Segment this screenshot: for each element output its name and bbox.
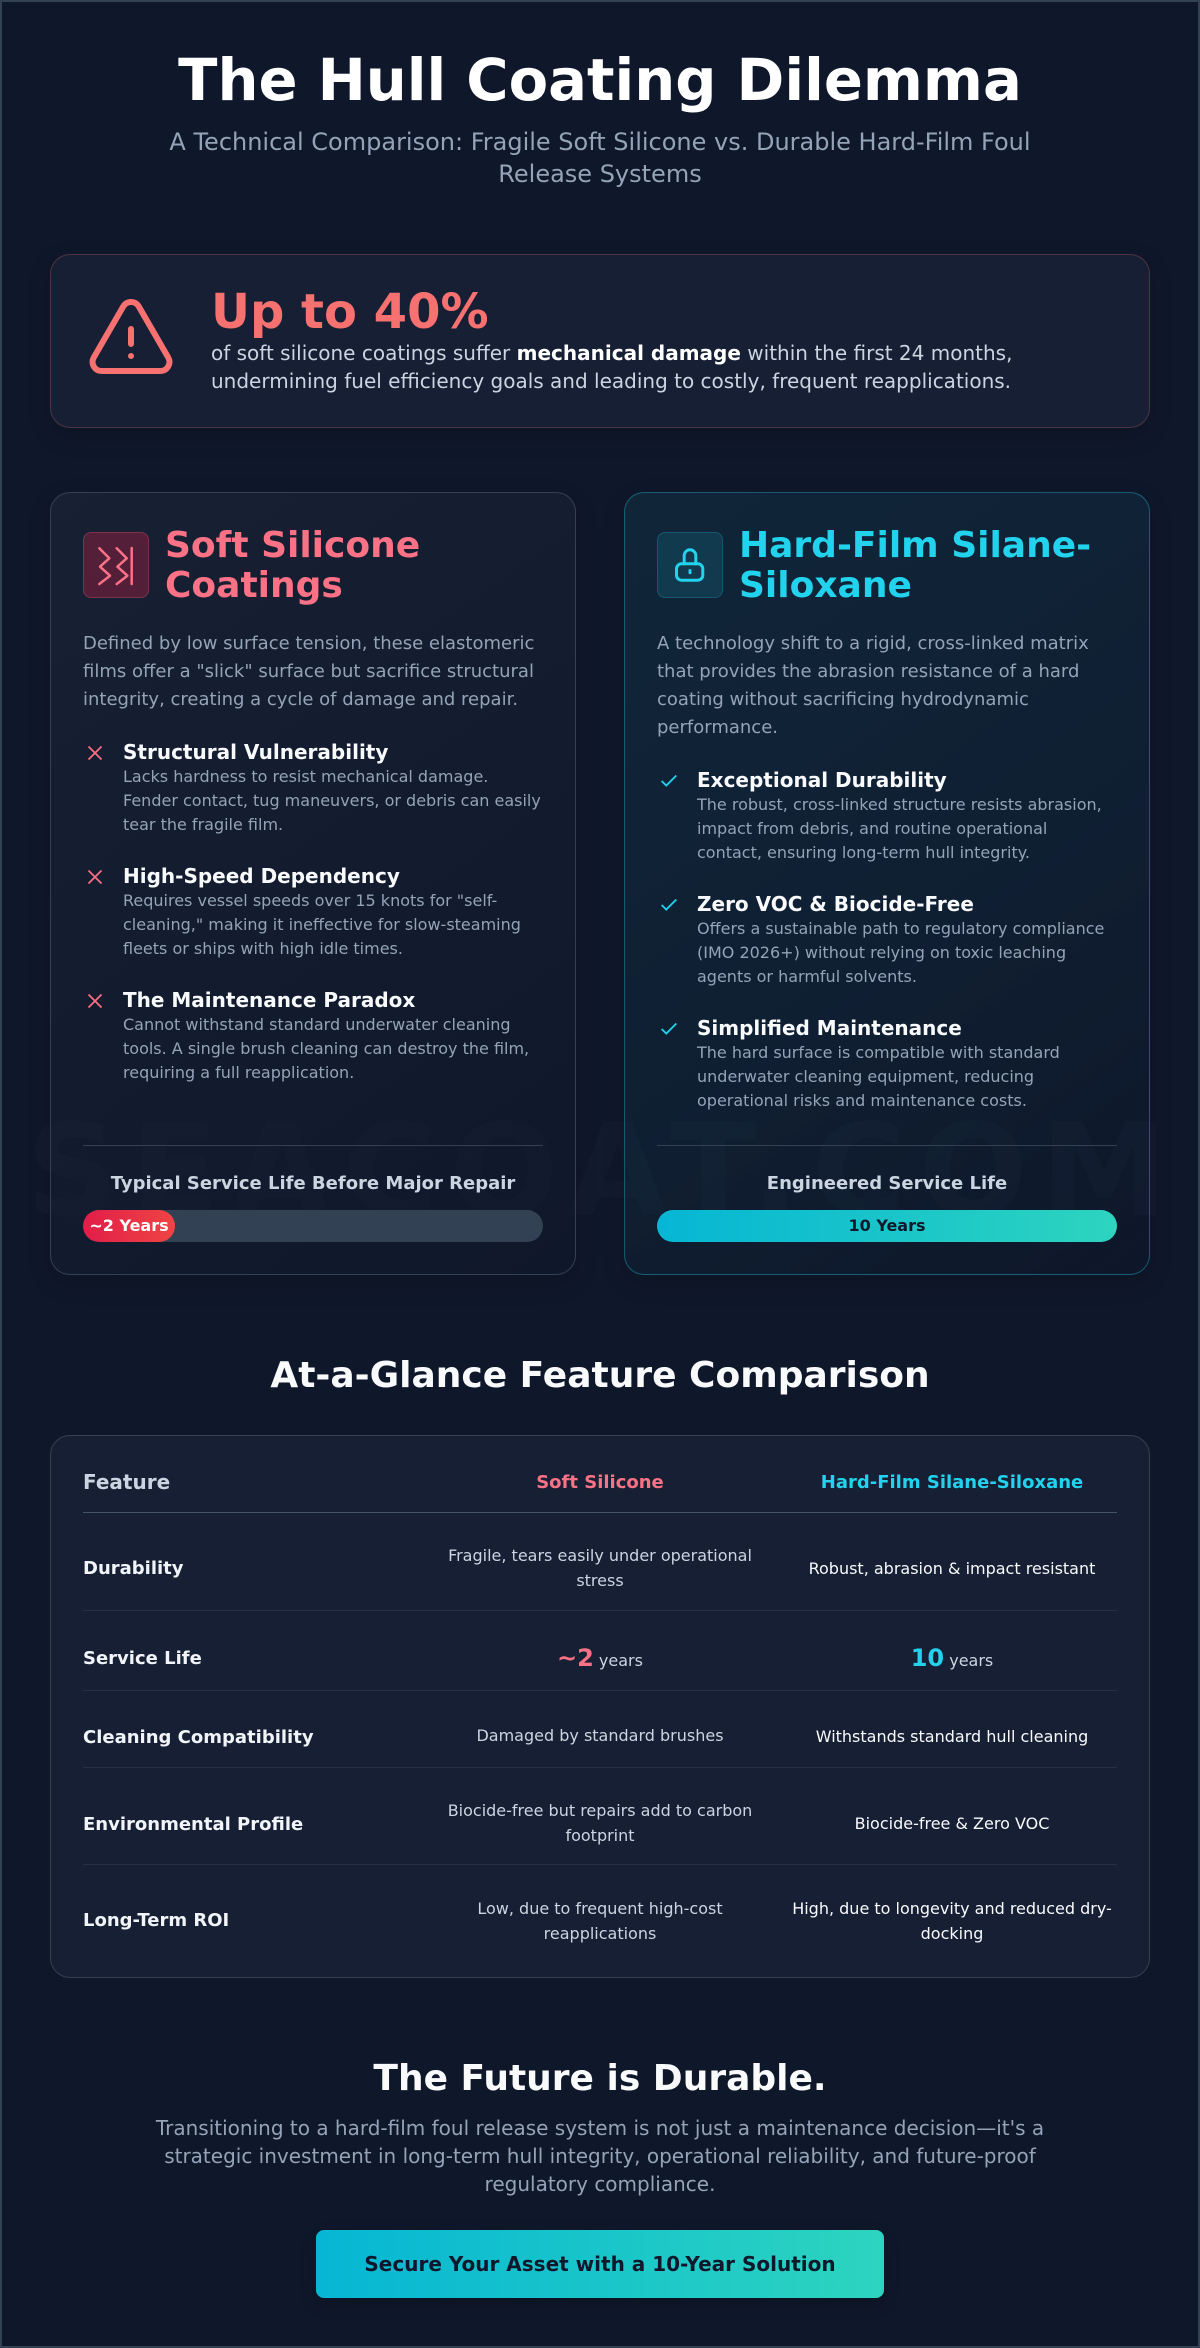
feature: high-speed dependency: cleaning," making it ineffective for slow-steaming <box>123 915 521 934</box>
service life label: Engineered Service Life <box>767 1173 1007 1194</box>
bar: service life 2 years <box>83 1210 543 1242</box>
footer text: Transitioning to a hard-film foul release system is not just a maintenance decision—it's a <box>156 2116 1044 2140</box>
feature: high-speed dependency: fleets or ships with high idle times. <box>123 939 403 958</box>
soft value: reapplications <box>544 1924 656 1943</box>
feature list <box>661 768 1104 1110</box>
feature: structural vulnerability: Lacks hardness to resist mechanical damage. <box>123 767 488 786</box>
soft value: Biocide-free but repairs add to carbon <box>448 1801 752 1820</box>
header: hard-film: Hard-Film Silane-Siloxane <box>821 1472 1083 1493</box>
row: service life <box>83 1644 1117 1691</box>
feature: high-speed dependency: Requires vessel speeds over 15 knots for "self- <box>123 891 497 910</box>
title: The Hull Coating Dilemma <box>178 47 1022 114</box>
service life label: Typical Service Life Before Major Repair <box>111 1173 515 1194</box>
comparison heading: At-a-Glance Feature Comparison <box>270 1355 930 1396</box>
feature: zero voc: agents or harmful solvents. <box>697 967 917 986</box>
description: A technology shift to a rigid, cross-linked matrix <box>657 633 1089 654</box>
feature: simplified maintenance: Simplified Maintenance <box>697 1016 962 1040</box>
icon: warning triangle <box>90 299 172 374</box>
soft value: Low, due to frequent high-cost <box>477 1899 723 1918</box>
bar: service life 10 years <box>657 1210 1117 1242</box>
feature: simplified maintenance: operational risks and maintenance costs. <box>697 1091 1027 1110</box>
label: Long-Term ROI <box>83 1910 229 1931</box>
row: long-term roi <box>83 1899 1112 1943</box>
soft value <box>448 1801 752 1845</box>
soft value: Fragile, tears easily under operational <box>448 1546 752 1565</box>
service life block <box>83 1145 543 1243</box>
header: feature: Feature <box>83 1470 170 1494</box>
feature: structural vulnerability: tear the fragile film. <box>123 815 283 834</box>
description: films offer a "slick" surface but sacrifice structural <box>83 661 534 682</box>
icon: soft silicone waves <box>83 532 149 598</box>
hard value: Biocide-free & Zero VOC <box>855 1814 1049 1833</box>
table header <box>83 1465 1117 1513</box>
header: soft silicone: Soft Silicone <box>536 1472 664 1493</box>
feature: structural vulnerability <box>88 740 541 834</box>
row: cleaning compatibility <box>83 1726 1117 1768</box>
bar: service life 2 years: ~2 Years <box>89 1216 169 1235</box>
feature: zero voc <box>661 892 1104 986</box>
row: durability <box>83 1546 1117 1611</box>
hard value: Robust, abrasion & impact resistant <box>809 1559 1095 1578</box>
label: Service Life <box>83 1648 202 1669</box>
hard value <box>792 1899 1112 1943</box>
call to action button: Secure Your Asset with a 10-Year Solution <box>364 2252 836 2276</box>
feature: exceptional durability: Exceptional Durability <box>697 768 947 792</box>
panel: soft silicone <box>50 492 576 1275</box>
feature: simplified maintenance <box>661 1016 1060 1110</box>
hard value: docking <box>921 1924 983 1943</box>
label: Cleaning Compatibility <box>83 1727 314 1748</box>
subtitle: Release Systems <box>498 160 702 188</box>
hard value: High, due to longevity and reduced dry- <box>792 1899 1112 1918</box>
footer text: regulatory compliance. <box>485 2172 715 2196</box>
panel: comparison table <box>50 1435 1150 1978</box>
feature: high-speed dependency <box>88 864 521 958</box>
panel: hard-film <box>624 492 1150 1275</box>
statistic description: of soft silicone coatings suffer mechanical damage within the first 24 months, <box>211 341 1012 365</box>
feature: structural vulnerability: Fender contact, tug maneuvers, or debris can easily <box>123 791 541 810</box>
label: Environmental Profile <box>83 1814 303 1835</box>
feature: simplified maintenance: underwater cleaning equipment, reducing <box>697 1067 1034 1086</box>
heading: Hard-Film Silane- <box>739 525 1091 566</box>
description: coating without sacrificing hydrodynamic <box>657 689 1029 710</box>
icon: padlock <box>657 532 723 598</box>
soft value: Damaged by standard brushes <box>476 1726 724 1745</box>
feature: exceptional durability <box>661 768 1102 862</box>
statistic description: undermining fuel efficiency goals and leading to costly, frequent reapplications. <box>211 369 1011 393</box>
feature: structural vulnerability: Structural Vulnerability <box>123 740 388 764</box>
call to action button <box>316 2230 884 2298</box>
soft value: stress <box>576 1571 624 1590</box>
hard value: 10 years <box>911 1644 993 1672</box>
soft value: ~2 years <box>557 1644 643 1672</box>
heading <box>739 525 1091 606</box>
service life block <box>657 1145 1117 1243</box>
feature: maintenance paradox <box>88 988 529 1082</box>
description <box>83 633 534 710</box>
feature: exceptional durability: contact, ensuring long-term hull integrity. <box>697 843 1030 862</box>
row: environmental profile <box>83 1801 1117 1865</box>
feature: high-speed dependency: High-Speed Dependency <box>123 864 400 888</box>
description: Defined by low surface tension, these elastomeric <box>83 633 534 654</box>
bar: service life 10 years: 10 Years <box>848 1216 926 1235</box>
heading <box>165 525 420 606</box>
feature list <box>88 740 541 1082</box>
description: integrity, creating a cycle of damage and repair. <box>83 689 518 710</box>
heading: Soft Silicone <box>165 525 420 566</box>
subtitle <box>169 128 1031 188</box>
feature: exceptional durability: impact from debris, and routine operational <box>697 819 1047 838</box>
subtitle: A Technical Comparison: Fragile Soft Silicone vs. Durable Hard-Film Foul <box>169 128 1031 156</box>
feature: exceptional durability: The robust, cross-linked structure resists abrasion, <box>697 795 1102 814</box>
feature: zero voc: Offers a sustainable path to regulatory compliance <box>697 919 1104 938</box>
feature: maintenance paradox: tools. A single brush cleaning can destroy the film, <box>123 1039 529 1058</box>
footer text: strategic investment in long-term hull integrity, operational reliability, and future-proof <box>164 2144 1036 2168</box>
description <box>657 633 1089 738</box>
feature: maintenance paradox: The Maintenance Paradox <box>123 988 415 1012</box>
soft value <box>448 1546 752 1590</box>
soft value: footprint <box>565 1826 635 1845</box>
feature: zero voc: Zero VOC & Biocide-Free <box>697 892 974 916</box>
heading: Coatings <box>165 565 343 606</box>
feature: zero voc: (IMO 2026+) without relying on toxic leaching <box>697 943 1066 962</box>
watermark: SEACOAT.COM <box>26 1097 1181 1246</box>
description: that provides the abrasion resistance of a hard <box>657 661 1079 682</box>
feature: simplified maintenance: The hard surface is compatible with standard <box>697 1043 1060 1062</box>
description: performance. <box>657 717 778 738</box>
footer text <box>156 2116 1044 2196</box>
statistic value: Up to 40% <box>211 284 489 340</box>
hard value: Withstands standard hull cleaning <box>816 1727 1088 1746</box>
feature: maintenance paradox: requiring a full reapplication. <box>123 1063 354 1082</box>
feature: maintenance paradox: Cannot withstand standard underwater cleaning <box>123 1015 511 1034</box>
heading: Siloxane <box>739 565 912 606</box>
footer heading: The Future is Durable. <box>373 2058 827 2099</box>
soft value <box>477 1899 723 1943</box>
statistic description <box>211 341 1012 393</box>
label: Durability <box>83 1558 184 1579</box>
panel: alert statistic <box>50 254 1150 428</box>
